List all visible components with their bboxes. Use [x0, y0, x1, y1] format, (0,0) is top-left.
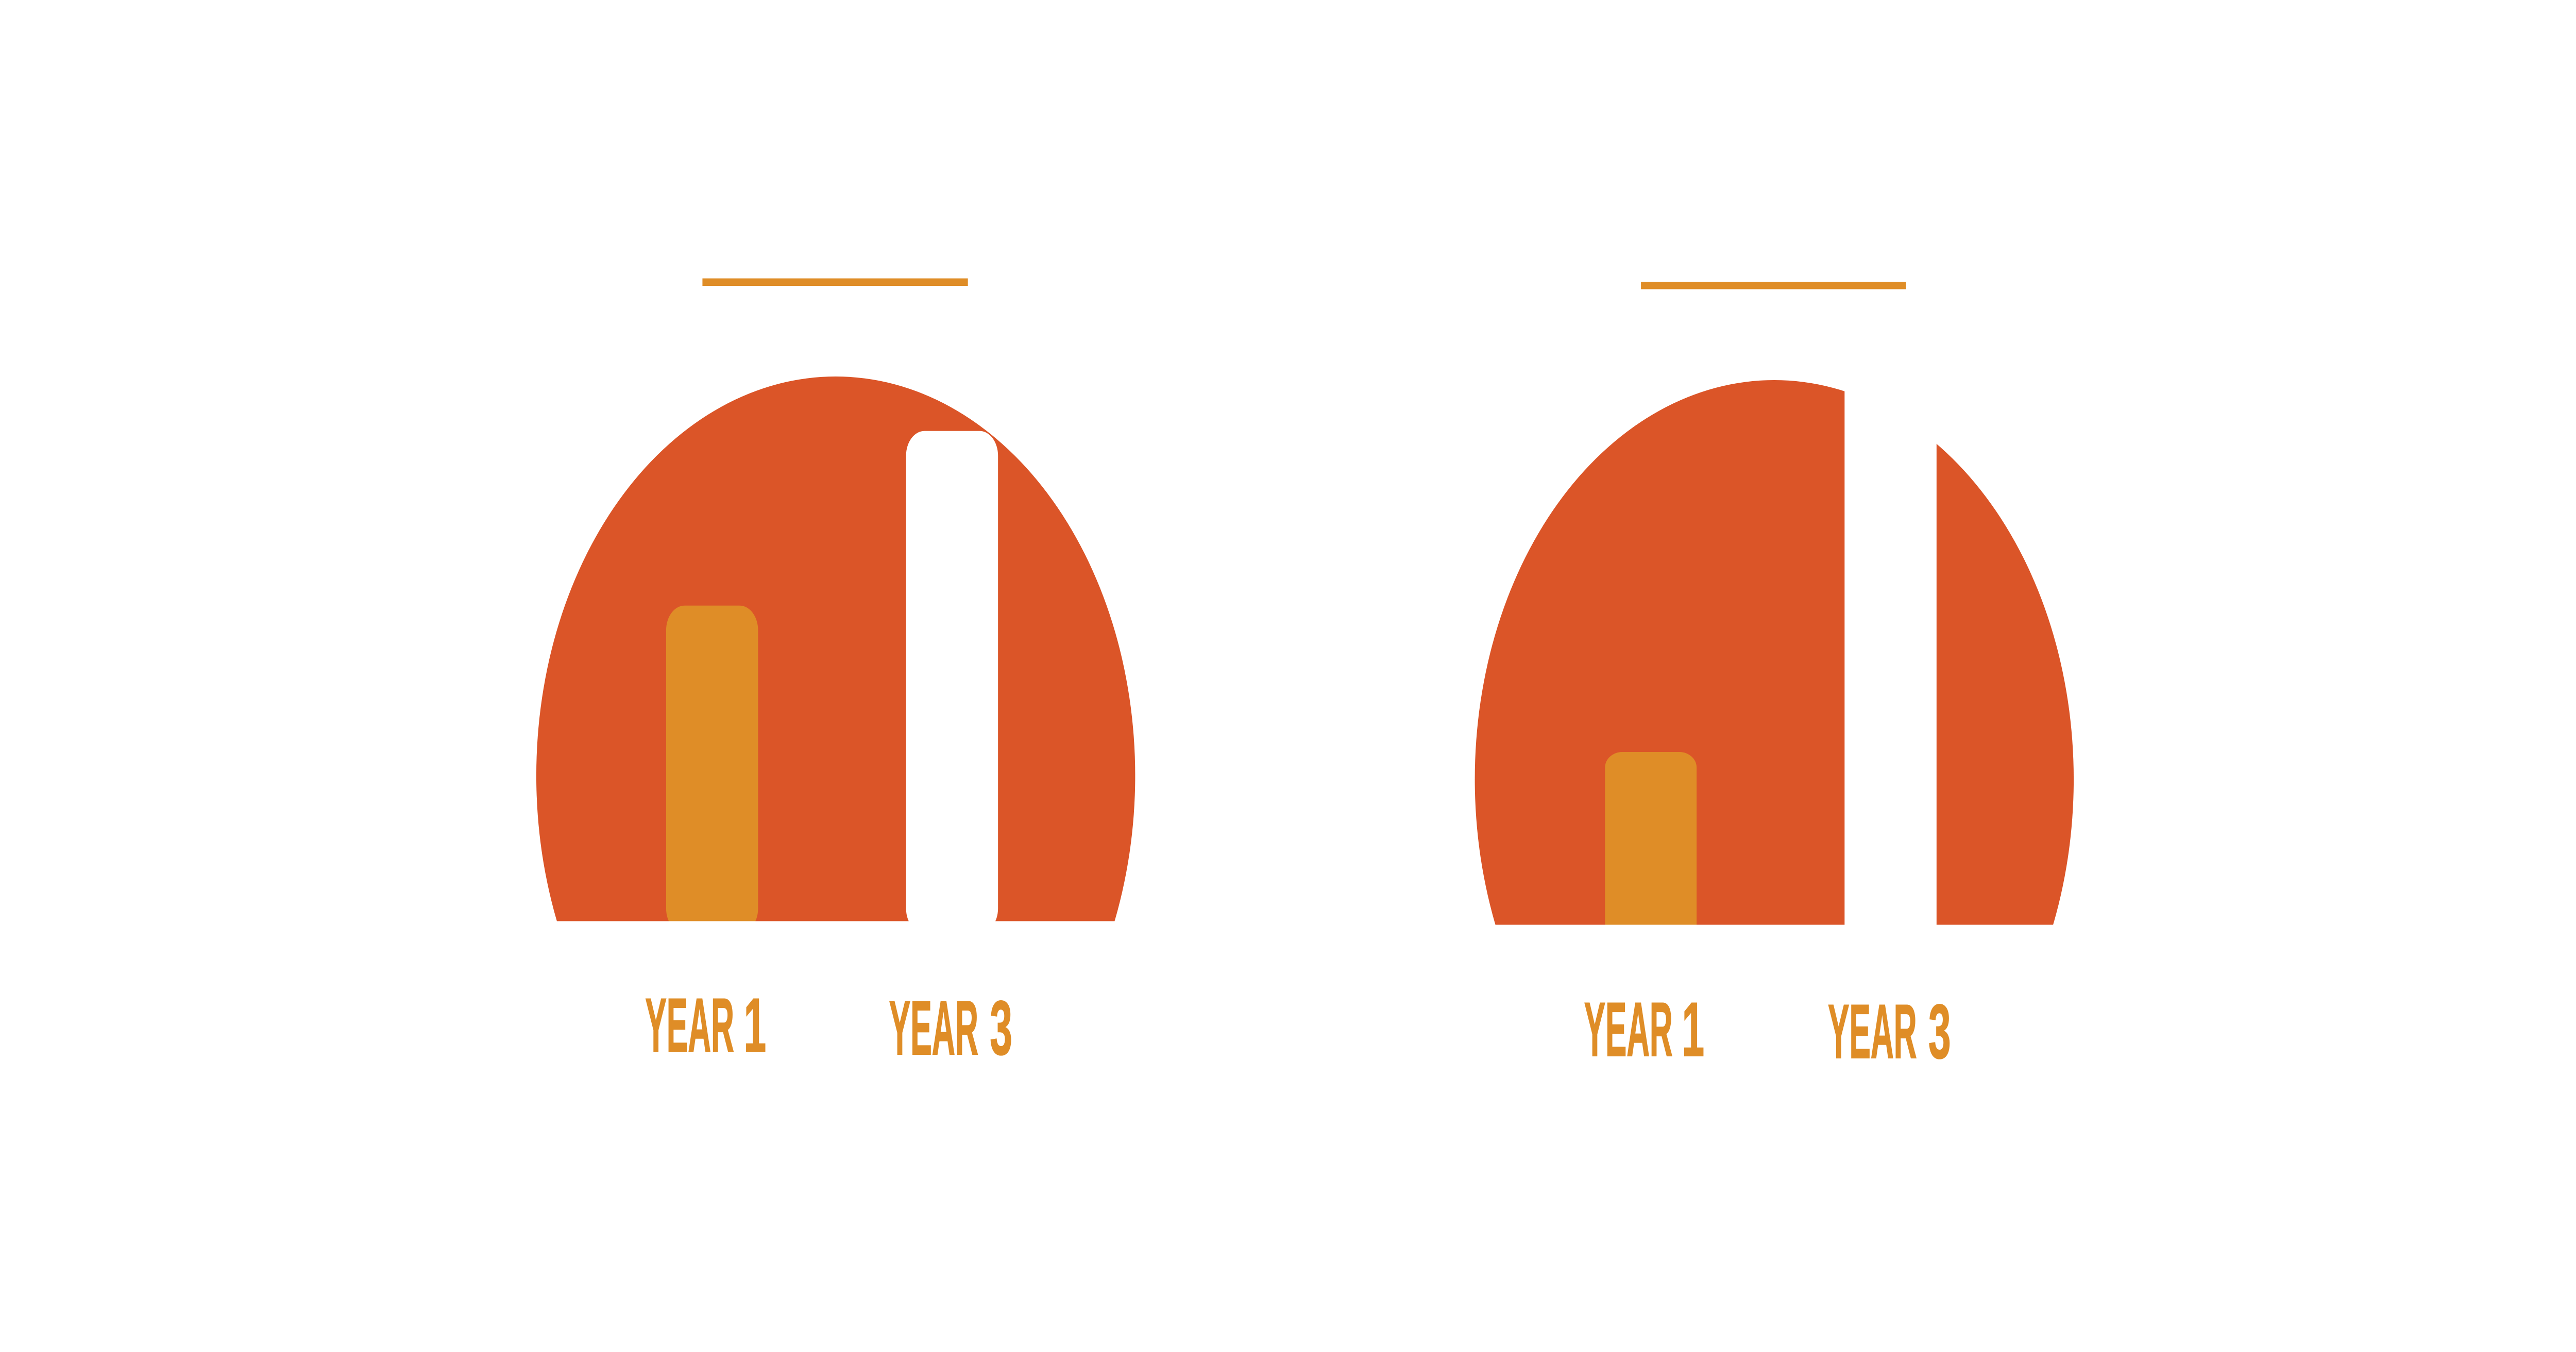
bar: year 1 left chart: [666, 606, 758, 933]
bar: year 1 right chart: [1605, 752, 1697, 925]
heading rule: right chart: [1641, 282, 1906, 289]
heading rule: left chart: [702, 278, 968, 286]
label: year 3 right chart: 3: [1928, 988, 1951, 1074]
label: year 3 left chart: 3: [990, 985, 1012, 1071]
label: year 3 right chart: YEAR: [1828, 988, 1917, 1074]
label: year 1 left chart: 1: [744, 982, 766, 1068]
bar: year 3 right chart: [1844, 350, 1937, 925]
panel: right chart: [1475, 282, 2074, 1059]
label: year 1 left chart: YEAR: [645, 982, 734, 1068]
label: year 1 right chart: YEAR: [1584, 986, 1673, 1072]
label: year 1 right chart: 1: [1682, 986, 1704, 1072]
panel: left chart: [536, 278, 1136, 1056]
label: year 3 left chart: YEAR: [889, 985, 978, 1071]
semicircle background: right chart: [1475, 380, 2074, 925]
semicircle background: left chart: [536, 376, 1136, 921]
bar: year 3 left chart: [906, 431, 998, 933]
